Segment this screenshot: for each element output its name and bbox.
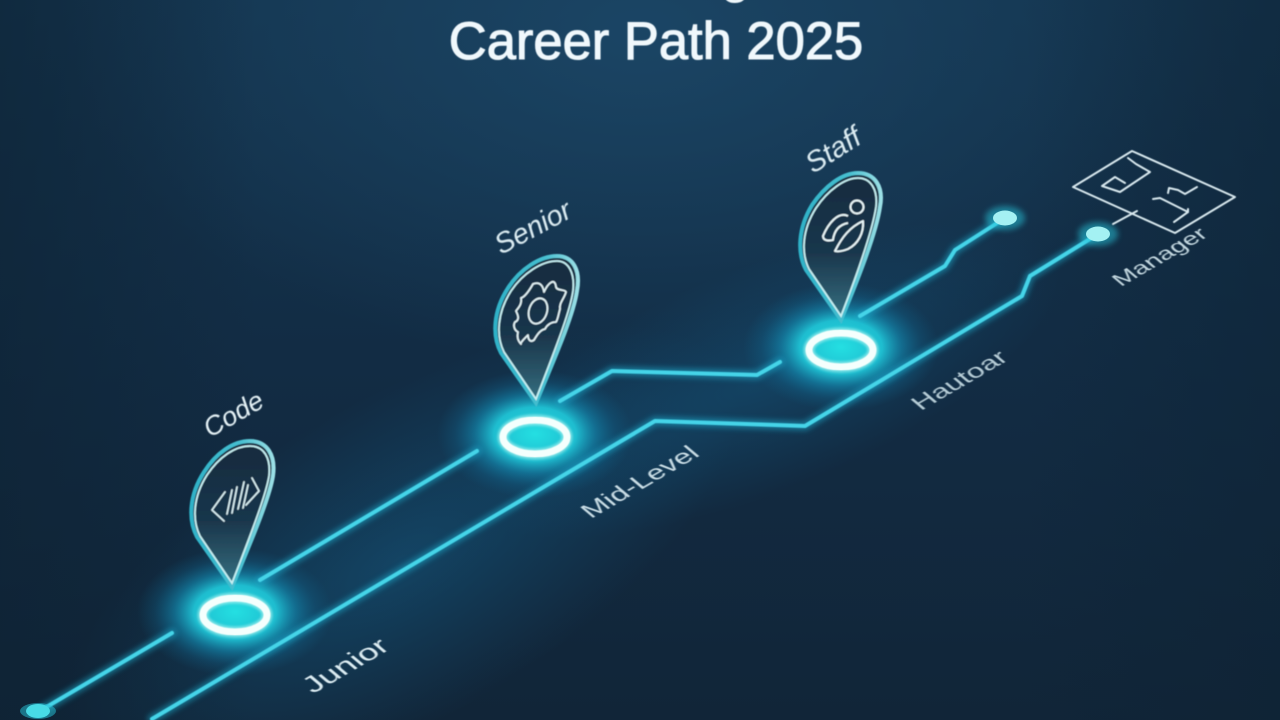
title (449, 0, 863, 71)
label: Staff: Staff (800, 120, 870, 180)
icon: gear (514, 282, 566, 344)
upper route glow (38, 218, 1005, 712)
lower route line (152, 234, 1098, 719)
icon: people (823, 200, 864, 251)
pin: senior (495, 256, 578, 403)
lower route glow (152, 234, 1098, 719)
start dot (20, 703, 56, 719)
path: lower route (152, 234, 1098, 719)
label: Hautoar: Hautoar (905, 346, 1014, 414)
label: Mid-Level: Mid-Level (575, 441, 705, 522)
node: code ring (137, 548, 333, 676)
label: Manager: Manager (1107, 224, 1213, 290)
end dot: manager route (1078, 222, 1118, 246)
node: senior ring (437, 370, 633, 498)
label: Senior: Senior (489, 194, 578, 261)
label: Code: Code (198, 385, 269, 443)
upper route line (38, 218, 1005, 712)
label: Junior: Junior (295, 633, 396, 698)
pin: staff (800, 173, 881, 320)
pin: code (191, 441, 274, 587)
node: staff ring (743, 283, 939, 411)
icon: code brackets (212, 478, 259, 521)
end dot: staff route (985, 206, 1025, 230)
icon: manager org board (1073, 151, 1235, 233)
title: Career Path 2025: Career Path 2025 (449, 12, 863, 71)
path: upper route segments (38, 218, 1005, 712)
